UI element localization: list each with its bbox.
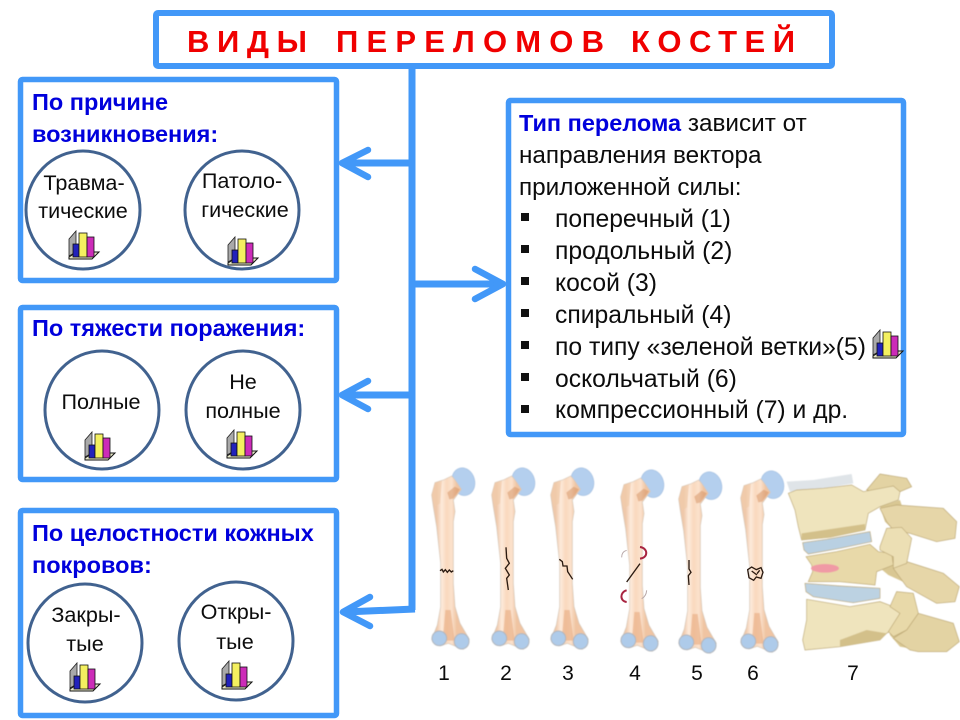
panel: by cause [20,80,336,280]
illustration: bone 4 spiral [621,467,667,651]
arrow: to fracture type panel [475,269,503,299]
text: intro: приложенной силы: [519,174,741,201]
labels: figure numbers: 7 [847,662,859,685]
heading: by cause: По причине [32,89,168,115]
circle: complete [45,351,159,469]
labels: figure numbers: 4 [629,662,641,685]
list: fracture types: косой (3) [555,270,657,297]
list: fracture types: поперечный (1) [555,206,731,233]
text: intro: Тип перелома зависит от [519,110,807,137]
circle: incomplete: полные [205,398,281,423]
circle: complete: Полные [61,389,141,414]
illustration: bone 6 comminuted [741,468,787,652]
panel: by skin integrity [20,510,336,716]
connector: vertical trunk and branches [345,67,498,612]
circle: pathological: Патоло- [202,168,282,193]
list: fracture types [521,206,866,424]
circle: closed: Закры- [51,602,121,627]
list: fracture types: продольный (2) [555,238,732,265]
illustration: bone 2 longitudinal [492,465,538,649]
arrow: to severity panel [342,381,368,409]
illustration: bone 1 transverse [432,465,478,649]
title [156,13,832,66]
circle: traumatic [26,151,140,269]
circle: traumatic: тические [38,198,128,223]
circle: pathological [185,151,299,269]
panel: by severity [20,308,336,480]
circle: closed [28,584,142,702]
arrow: to cause panel [342,150,368,177]
panel: fracture types [508,100,904,434]
list: fracture types: спиральный (4) [555,302,731,329]
circle: open [179,582,293,700]
arrow: to skin panel [343,597,370,626]
circle: incomplete: Не [229,369,257,394]
circle: incomplete [186,351,300,469]
labels: figure numbers: 2 [500,662,512,685]
heading: by skin integrity: По целостности кожных [32,520,314,546]
labels: figure numbers: 3 [562,662,574,685]
list: fracture types: по типу «зеленой ветки»(5) [555,334,866,361]
illustration: bone 5 greenstick [679,469,725,653]
labels: figure numbers: 5 [691,662,703,685]
title: КОСТЕЙ [631,23,795,59]
circle: pathological: гические [201,197,289,222]
heading: by cause: возникновения: [32,121,218,147]
list: fracture types: компрессионный (7) и др. [555,397,848,424]
icon: chart [873,330,903,358]
labels: figure numbers [438,662,859,685]
title: ВИДЫ [187,24,307,59]
circle: closed: тые [66,631,104,656]
title: ПЕРЕЛОМОВ [336,24,604,59]
labels: figure numbers: 6 [747,662,759,685]
list: fracture types: оскольчатый (6) [555,366,737,393]
illustration: bone 3 oblique [551,465,597,649]
circle: traumatic: Травма- [43,170,125,195]
circle: open: тые [216,629,254,654]
text: intro: направления вектора [519,142,762,169]
labels: figure numbers: 1 [438,662,450,685]
illustration: vertebrae 7 compression [787,474,959,652]
heading: by skin integrity: покровов: [32,552,152,578]
heading: by severity: По тяжести поражения: [32,315,305,341]
circle: open: Откры- [201,599,271,624]
